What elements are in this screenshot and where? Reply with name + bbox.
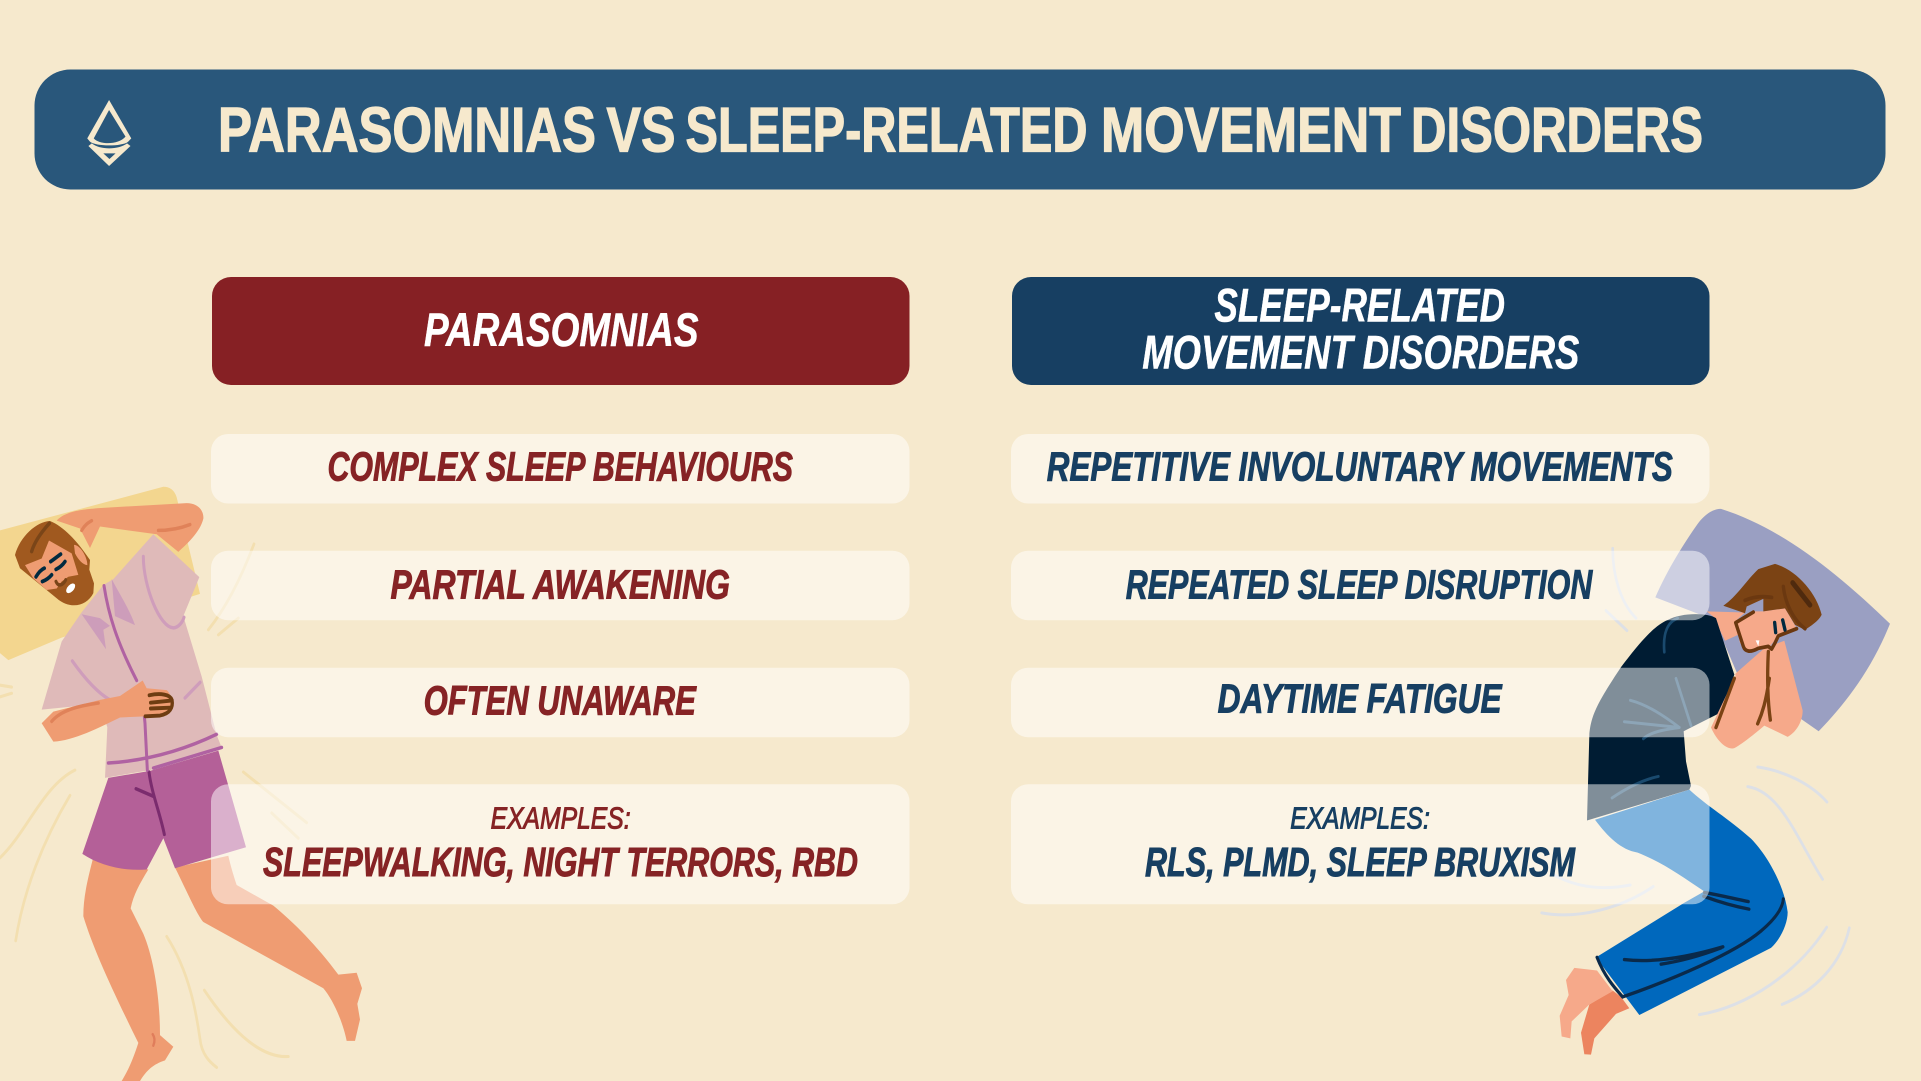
feet xyxy=(1581,991,1629,1055)
row: repeated sleep disruption: REPEATED SLEEP DISRUPTION xyxy=(1126,561,1593,607)
title text xyxy=(218,96,1703,166)
motion lines xyxy=(0,544,307,1067)
pyjama shirt xyxy=(42,534,222,778)
t-shirt xyxy=(1587,614,1734,821)
row: partial awakening: PARTIAL AWAKENING xyxy=(390,561,730,607)
trousers xyxy=(1595,790,1788,1015)
row: repeated sleep disruption xyxy=(1011,551,1710,620)
panel: sleep-related movement disorders column xyxy=(1011,277,1710,904)
raised arm xyxy=(57,503,203,552)
column heading: sleep-related movement disorders: SLEEP-RELATED xyxy=(1214,279,1505,332)
head xyxy=(1735,608,1797,652)
row: movement disorder examples: EXAMPLES: xyxy=(1290,801,1430,836)
row: complex sleep behaviours xyxy=(211,434,910,504)
row: partial awakening xyxy=(211,551,910,620)
row: daytime fatigue: DAYTIME FATIGUE xyxy=(1218,676,1503,722)
shirt placket and hem xyxy=(104,586,222,770)
illustration: man sleeping on his back (left) xyxy=(0,487,362,1081)
title text: SLEEP-RELATED xyxy=(686,96,1088,166)
title text: DISORDERS xyxy=(1411,96,1703,166)
row: repetitive involuntary movements xyxy=(1011,434,1710,504)
title text: VS xyxy=(606,96,676,166)
resting arm and hand xyxy=(42,680,172,742)
icon: sleep droplet logo xyxy=(87,100,131,166)
row: complex sleep behaviours: COMPLEX SLEEP BEHAVIOURS xyxy=(328,444,793,490)
head xyxy=(15,521,94,605)
row: parasomnia examples: SLEEPWALKING, NIGHT TERRORS, RBD xyxy=(263,839,858,885)
row: parasomnia examples: EXAMPLES: xyxy=(491,801,631,836)
pillow: yellow xyxy=(0,487,200,660)
pillow: lavender xyxy=(1655,509,1890,731)
row: movement disorder examples xyxy=(1011,784,1710,904)
row: repetitive involuntary movements: REPETITIVE INVOLUNTARY MOVEMENTS xyxy=(1047,444,1673,490)
neck xyxy=(1707,611,1745,641)
row: parasomnia examples xyxy=(211,784,910,904)
shirt creases xyxy=(72,557,200,700)
title banner xyxy=(34,70,1886,190)
illustration: man curled on his side (right) xyxy=(1542,509,1890,1055)
column heading: parasomnias: PARASOMNIAS xyxy=(424,303,698,356)
row: often unaware: OFTEN UNAWARE xyxy=(424,678,697,724)
row: movement disorder examples: RLS, PLMD, SLEEP BRUXISM xyxy=(1145,839,1576,885)
shorts xyxy=(82,751,246,870)
legs xyxy=(83,856,362,1081)
row: daytime fatigue xyxy=(1011,668,1710,737)
column heading: parasomnias xyxy=(212,277,910,385)
collar xyxy=(82,579,135,649)
column heading: sleep-related movement disorders: MOVEMENT DISORDERS xyxy=(1142,326,1579,379)
title text: MOVEMENT xyxy=(1101,96,1401,166)
panel: parasomnias column xyxy=(211,277,910,904)
title text: PARASOMNIAS xyxy=(218,96,596,166)
arms and hands xyxy=(1711,641,1803,748)
column heading: sleep-related movement disorders xyxy=(1012,277,1710,385)
row: often unaware xyxy=(211,668,910,737)
motion lines xyxy=(1542,548,1849,1015)
